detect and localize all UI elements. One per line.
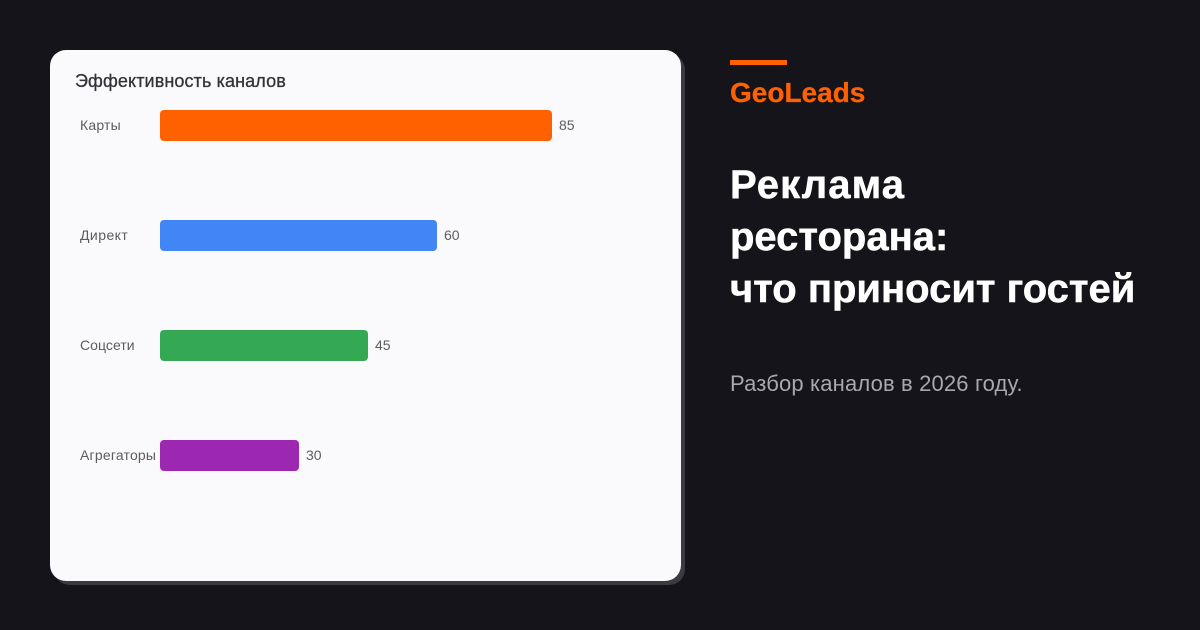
bar: 85 [160, 110, 552, 141]
chart title: Эффективность каналов [75, 71, 286, 91]
bar row: Карты [80, 110, 575, 141]
label: Соцсети [80, 337, 135, 353]
main heading: что приносит гостей [730, 267, 1135, 311]
main heading: ресторана: [730, 215, 948, 259]
bar row: Агрегаторы [80, 440, 322, 471]
bar row: Директ [80, 220, 460, 251]
panel: chart card [50, 50, 681, 581]
main heading [730, 163, 1135, 311]
bar: 60 [160, 220, 437, 251]
value: 60 [444, 227, 460, 243]
subtitle: Разбор каналов в 2026 году. [730, 371, 1023, 396]
bar row: Соцсети [80, 330, 391, 361]
value: 30 [306, 447, 322, 463]
value: 45 [375, 337, 391, 353]
main heading: Реклама [730, 163, 905, 207]
value: 85 [559, 117, 575, 133]
label: Агрегаторы [80, 447, 156, 463]
label: Директ [80, 227, 128, 243]
bar: 30 [160, 440, 299, 471]
label: Карты [80, 117, 121, 133]
bar: 45 [160, 330, 368, 361]
brand name: GeoLeads [730, 77, 865, 108]
accent line [730, 60, 787, 65]
